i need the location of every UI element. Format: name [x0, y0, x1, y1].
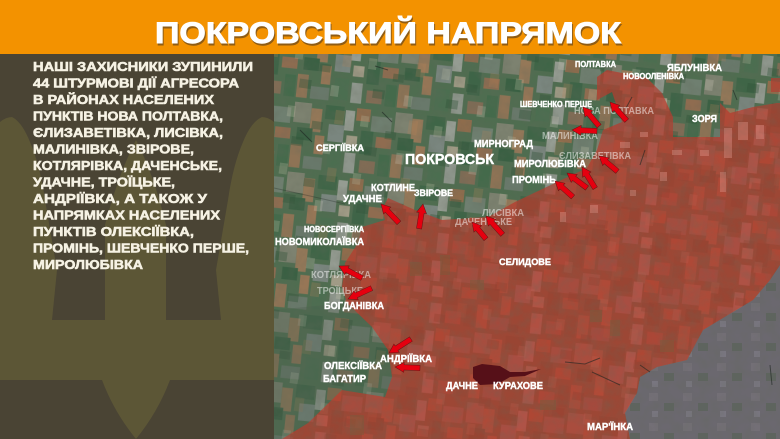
place labels: ДАЧЕНСЬКЕ — [455, 217, 512, 228]
place labels: МАЛИНІВКА — [542, 131, 598, 142]
place labels: НОВООЛЕНІВКА — [623, 72, 684, 81]
arrow: Lysivka — [482, 213, 506, 238]
body text — [33, 59, 253, 272]
body text: КОТЛЯРІВКА, ДАЧЕНСЬКЕ, — [33, 158, 222, 173]
place labels: ШЕВЧЕНКО ПЕРШЕ — [520, 100, 593, 109]
place labels: НОВА ПОЛТАВКА — [574, 106, 654, 117]
place labels: ЯБЛУНІВКА — [667, 63, 722, 74]
body text: 44 ШТУРМОВІ ДІЇ АГРЕСОРА — [33, 76, 240, 90]
arrow: Promin — [552, 177, 576, 201]
place labels: ПРОМІНЬ — [512, 175, 556, 186]
arrow: Nova Poltavka west — [579, 104, 603, 129]
place labels: НОВОСЕРГІЇВКА — [304, 225, 364, 234]
place labels: ДАЧНЕ — [446, 381, 478, 392]
place labels: АНДРІЇВКА — [380, 352, 432, 365]
title: ПОКРОВСЬКИЙ НАПРЯМОК — [155, 16, 622, 50]
attack arrows — [337, 99, 630, 373]
place labels: ПОКРОВСЬК — [405, 152, 494, 168]
place labels: ОЛЕКСІЇВКА — [324, 359, 382, 372]
arrow: Zvirove — [414, 203, 428, 229]
place labels: СЕРГІЇВКА — [316, 143, 364, 154]
place labels: МИРНОГРАД — [474, 139, 533, 150]
header bar — [0, 0, 780, 54]
arrow: Kotliarivka — [337, 262, 364, 282]
trident watermark — [0, 117, 274, 439]
place labels: БОГДАНІВКА — [324, 301, 384, 312]
noise texture — [274, 54, 780, 439]
place labels: ТРОЇЦЬКЕ — [317, 284, 363, 297]
body text: МИРОЛЮБІВКА — [33, 257, 144, 272]
place labels — [275, 60, 722, 433]
arrow: Troitske — [346, 284, 374, 304]
body text: УДАЧНЕ, ТРОЇЦЬКЕ, — [33, 174, 175, 190]
map — [274, 54, 780, 439]
arrow: Malynivka — [572, 125, 597, 136]
body text: НАПРЯМКАХ НАСЕЛЕНИХ — [33, 208, 220, 222]
darker fields in occupied area — [350, 255, 674, 435]
arrow: Yelyzavetivka — [596, 152, 621, 175]
small occupied patch — [771, 78, 780, 92]
place labels: БАГАТИР — [323, 374, 366, 385]
light fields in occupied area — [560, 122, 764, 222]
arrow: Nova Poltavka east — [606, 99, 630, 124]
arrow: Myroliubivka west — [564, 169, 590, 192]
place labels: ЗОРЯ — [692, 113, 717, 125]
place labels: ЄЛИЗАВЕТІВКА — [559, 151, 631, 162]
place labels: МАР'ЇНКА — [587, 420, 633, 433]
body text: АНДРІЇВКА, А ТАКОЖ У — [33, 191, 208, 206]
left panel background — [0, 54, 274, 439]
body text: В РАЙОНАХ НАСЕЛЕНИХ — [33, 92, 214, 107]
body text: ПУНКТІВ ОЛЕКСІЇВКА, — [33, 224, 194, 239]
urban grey area — [625, 265, 780, 439]
Kurakhove reservoir — [473, 364, 541, 385]
arrow: Udachne — [377, 201, 403, 226]
body text: НАШІ ЗАХИСНИКИ ЗУПИНИЛИ — [33, 59, 253, 74]
place labels: УДАЧНЕ — [343, 194, 382, 205]
place labels: КОТЛИНЕ — [371, 183, 415, 194]
body text: ЄЛИЗАВЕТІВКА, ЛИСІВКА, — [33, 125, 223, 140]
arrow: Andriivka north — [386, 335, 414, 357]
arrow: Andriivka south — [395, 362, 420, 373]
place labels: МИРОЛЮБІВКА — [514, 159, 586, 170]
arrow: Dachenske — [468, 219, 490, 242]
place labels: ПОЛТАВКА — [575, 60, 616, 69]
satellite fields — [274, 54, 780, 439]
place labels: КУРАХОВЕ — [493, 381, 543, 392]
place labels: ЗВІРОВЕ — [414, 188, 453, 199]
place labels: КОТЛЯРІВКА — [311, 270, 371, 281]
green area near Oleksiivka — [274, 303, 392, 439]
place labels: НОВОМИКОЛАЇВКА — [275, 235, 364, 248]
place labels: ЛИСІВКА — [482, 208, 524, 219]
arrow: Myroliubivka east — [578, 164, 599, 191]
occupied territory — [282, 70, 780, 439]
place labels: СЕЛИДОВЕ — [499, 257, 551, 268]
rivers — [274, 66, 772, 385]
body text: ПУНКТІВ НОВА ПОЛТАВКА, — [33, 108, 223, 124]
body text: МАЛИНІВКА, ЗВІРОВЕ, — [33, 142, 194, 156]
body text: ПРОМІНЬ, ШЕВЧЕНКО ПЕРШЕ, — [33, 240, 249, 256]
